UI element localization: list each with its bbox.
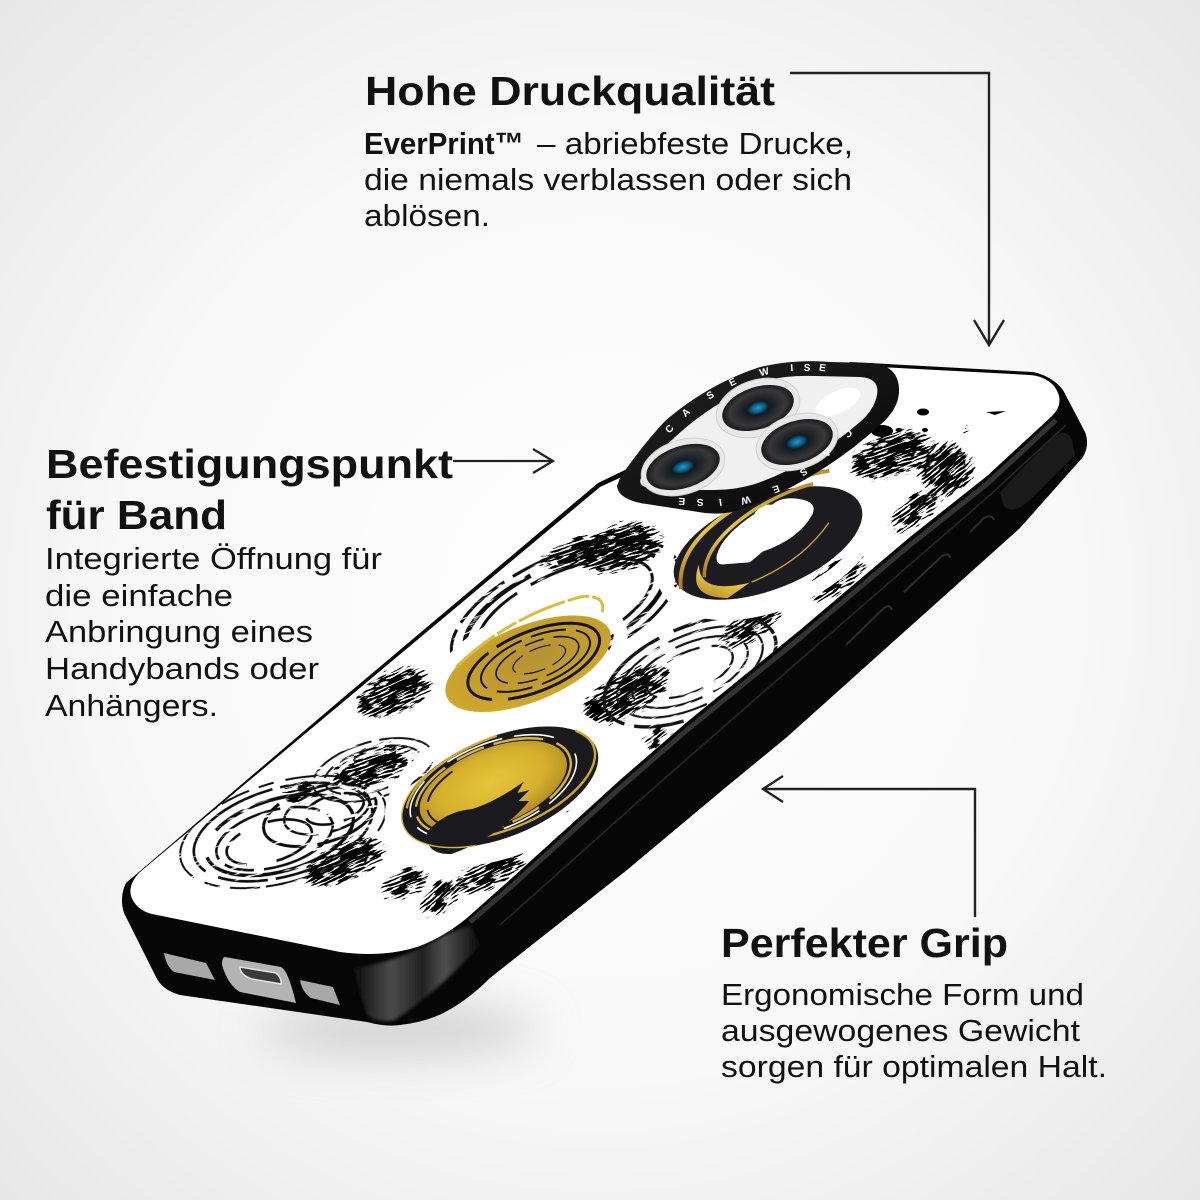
side button: volume — [904, 554, 950, 592]
abstract print — [167, 408, 1006, 931]
camera window — [640, 376, 877, 490]
bottom corner highlight — [353, 925, 480, 1021]
ring lettering: C — [841, 426, 854, 439]
case body — [122, 362, 1087, 1026]
text block: print quality — [364, 68, 853, 233]
phone shadow — [260, 1006, 540, 1054]
body: strap attachment — [45, 541, 382, 723]
lens right — [749, 403, 845, 481]
gold disc upper — [445, 594, 611, 712]
right speaker — [300, 980, 340, 1005]
ring lettering: E — [771, 482, 781, 495]
heading: grip: Perfekter Grip — [721, 920, 1008, 966]
camera surround — [617, 361, 899, 514]
body: strap attachment: Anbringung eines — [45, 614, 313, 649]
ring lettering: W — [758, 366, 771, 379]
side grip panel — [1000, 433, 1075, 509]
arrow: to strap point — [453, 449, 553, 473]
body: grip — [721, 977, 1107, 1084]
ring lettering — [664, 363, 854, 507]
ring lettering: W — [739, 493, 752, 506]
camera ring — [617, 361, 899, 514]
heading: print quality: Hohe Druckqualität — [365, 68, 775, 114]
ring lettering: A — [820, 445, 833, 459]
charging port opening — [240, 967, 281, 984]
body: print quality: ablösen. — [364, 198, 490, 233]
charging and speaker ports — [164, 953, 340, 1005]
arrow: to print surface — [790, 73, 1004, 345]
body: strap attachment: Anhängers. — [45, 688, 218, 723]
ink dots — [871, 408, 1006, 437]
ring lettering: A — [680, 407, 693, 420]
side rim seam — [500, 425, 1066, 925]
black and gold ring — [674, 468, 862, 600]
black ink splatter — [272, 413, 992, 931]
ring lettering: C — [664, 423, 677, 436]
gold disc lower — [401, 726, 598, 854]
side button: small — [970, 516, 994, 532]
side rim highlight — [470, 420, 1056, 922]
swirl upper left — [312, 736, 434, 803]
body: strap attachment: Integrierte Öffnung für — [45, 541, 382, 576]
swirl upper centre — [450, 538, 678, 654]
ring lettering: S — [797, 465, 809, 478]
charging port — [222, 957, 296, 1003]
body: strap attachment: Handybands oder — [45, 651, 319, 686]
halo rings — [371, 447, 892, 888]
ring lettering: I — [718, 496, 722, 507]
side button: action — [846, 606, 892, 645]
text block: grip — [721, 920, 1107, 1084]
ring lettering: S — [696, 496, 704, 507]
body: print quality: die niemals verblassen oder sich — [364, 162, 852, 197]
body: grip: ausgewogenes Gewicht — [721, 1013, 1080, 1048]
body: grip: Ergonomische Form und — [721, 977, 1084, 1012]
white printed surface — [130, 366, 1060, 954]
ring lettering: E — [678, 495, 686, 506]
ring lettering: S — [804, 363, 811, 374]
heading: strap attachment — [46, 441, 453, 538]
body: strap attachment: die einfache — [45, 578, 233, 613]
clear plate shine — [812, 382, 864, 422]
ring lettering: S — [705, 389, 717, 402]
swirl lower left — [178, 774, 386, 890]
body: grip: sorgen für optimalen Halt. — [721, 1049, 1107, 1084]
lens top — [708, 368, 808, 448]
body: print quality: EverPrint™ — [364, 126, 524, 161]
swirl centre right — [602, 618, 778, 729]
arrow: to side grip — [763, 776, 975, 917]
phone case with print — [122, 361, 1087, 1026]
body: print quality: – abriebfeste Drucke, — [537, 126, 853, 161]
body: print quality — [364, 126, 853, 233]
lens left — [634, 428, 732, 506]
ring lettering: E — [727, 376, 739, 389]
heading: strap attachment: Befestigungspunkt — [46, 441, 453, 487]
ring lettering: I — [790, 363, 794, 374]
left speaker — [164, 953, 215, 980]
ring lettering: E — [818, 363, 827, 374]
text block: strap attachment — [45, 441, 453, 723]
heading: strap attachment: für Band — [46, 492, 227, 538]
